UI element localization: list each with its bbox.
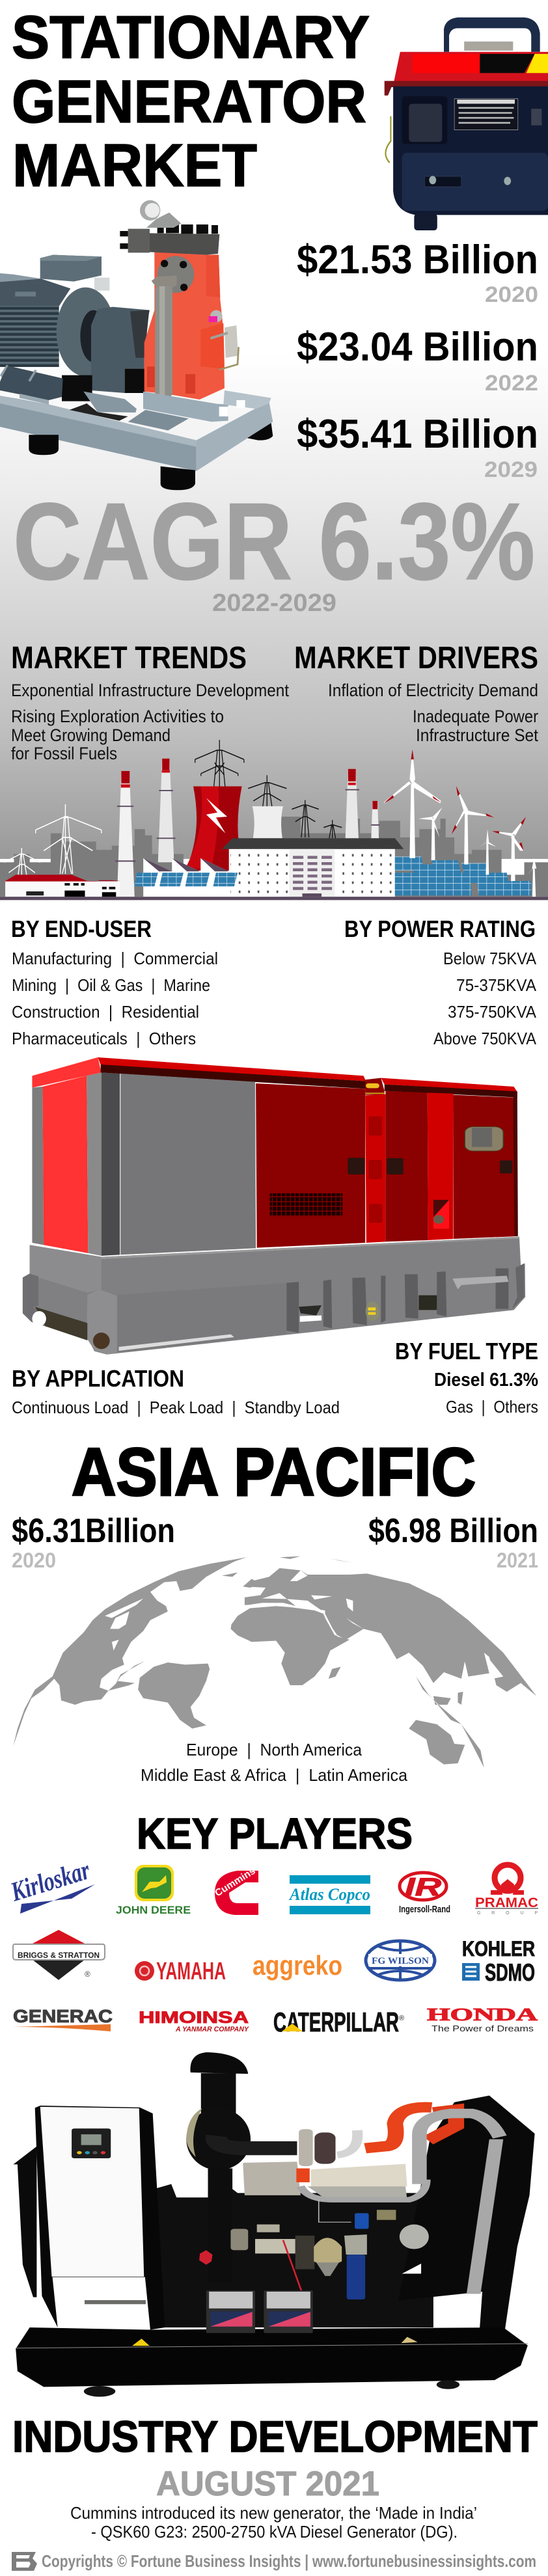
illustration: power plant skyline: [0, 740, 548, 900]
logo: Honda: HONDA: [427, 2005, 538, 2024]
logo: Ingersoll Rand: [399, 1873, 450, 1915]
title: GENERATOR: [12, 68, 366, 135]
Asia Pacific value 2020: $6.31Billion: [12, 1512, 175, 1550]
CAGR figure: 2022-2029: [212, 590, 336, 617]
panel: by fuel type: [395, 1338, 538, 1417]
logo: Caterpillar: ®: [399, 2014, 404, 2022]
logo: FG Wilson: [366, 1941, 435, 1980]
text: development description: Cummins introduced its new generator, the ‘Made in India’: [70, 2503, 477, 2523]
pylons: [4, 740, 342, 874]
panel: by power rating: [344, 915, 537, 1048]
icon: portable red generator: [385, 18, 548, 230]
panel: market trends: Rising Exploration Activities to: [11, 707, 224, 726]
white cooling tower: [253, 806, 283, 838]
logo: Pramac: PRAMAC: [475, 1895, 538, 1910]
logo: Himoinsa: [139, 2009, 250, 2033]
date: August 2021: AUGUST 2021: [156, 2465, 379, 2503]
text: development description: - QSK60 G23: 2500-2750 kVA Diesel Generator (DG).: [91, 2522, 458, 2542]
panel: by power rating: Below 75KVA: [443, 949, 537, 968]
logo: Briggs and Stratton: ®: [85, 1970, 90, 1979]
logo: Honda: [427, 2005, 538, 2033]
image: open diesel generator set with engine: [13, 2052, 535, 2396]
logo: Briggs and Stratton: BRIGGS & STRATTON: [18, 1951, 100, 1960]
ground strip: [0, 897, 548, 900]
logo: Yamaha: YAMAHA: [156, 1958, 226, 1985]
panel: by application: [12, 1365, 340, 1417]
logo: FG Wilson: FG WILSON: [372, 1956, 429, 1966]
logo: Kohler SDMO: [462, 1937, 535, 1986]
panel: by end-user: Construction | Residential: [12, 1002, 199, 1022]
title: [12, 3, 370, 199]
panel: market trends: MARKET TRENDS: [11, 641, 247, 675]
Asia Pacific value 2020: 2020: [12, 1549, 56, 1572]
chimney group: [115, 759, 379, 897]
regions list: Europe | North America: [186, 1740, 363, 1759]
market value 2020: 2020: [485, 282, 538, 307]
Asia Pacific value 2021: 2021: [497, 1549, 538, 1572]
title: STATIONARY: [12, 3, 370, 71]
logo: John Deere: JOHN DEERE: [116, 1904, 191, 1916]
logo: Kohler SDMO: KOHLER: [462, 1937, 535, 1960]
logo: Pramac: GROUP: [477, 1911, 538, 1916]
logo: Briggs and Stratton: [13, 1930, 105, 1980]
panel: market trends: Meet Growing Demand: [11, 725, 171, 745]
panel: by application: BY APPLICATION: [12, 1365, 184, 1392]
factory sheds: [143, 858, 229, 897]
logo: Atlas Copco: Atlas Copco: [288, 1885, 370, 1904]
world map: [13, 1556, 536, 1768]
icon: electric motor and red pump unit: [0, 200, 273, 490]
panel: market trends: for Fossil Fuels: [11, 744, 117, 763]
panel: by application: Continuous Load | Peak Load | Standby Load: [12, 1398, 340, 1417]
market value 2022: [297, 325, 538, 396]
logo: Kirloskar: [7, 1855, 95, 1914]
image: enclosed red and grey diesel generator: [23, 1057, 525, 1355]
logo: Caterpillar: CATERPILLAR: [273, 2007, 399, 2037]
logo: Himoinsa: A YANMAR COMPANY: [175, 2026, 250, 2033]
market value 2029: 2029: [484, 457, 538, 482]
panel: by power rating: 375-750KVA: [448, 1002, 537, 1022]
Asia Pacific value 2020: [12, 1512, 175, 1572]
red cooling tower: [185, 787, 242, 871]
market value 2022: $23.04 Billion: [297, 325, 538, 370]
panel: market drivers: Infrastructure Set: [416, 725, 538, 745]
panel: by end-user: [11, 915, 218, 1048]
regions list: Middle East & Africa | Latin America: [141, 1765, 408, 1785]
regions list: [141, 1740, 408, 1785]
logo: Cummins: [213, 1865, 258, 1915]
logo: Caterpillar: [273, 2007, 404, 2037]
logo: Cummins: Cummins: [213, 1865, 257, 1899]
logo: Atlas Copco: [288, 1875, 370, 1914]
panel: by power rating: 75-375KVA: [456, 975, 537, 995]
Asia Pacific value 2021: [368, 1512, 538, 1572]
panel: by end-user: Mining | Oil & Gas | Marine: [12, 975, 210, 995]
heading: key players: KEY PLAYERS: [137, 1810, 413, 1858]
market value 2020: $21.53 Billion: [297, 237, 538, 282]
logo: Pramac: [475, 1865, 538, 1916]
market value 2020: [297, 237, 538, 307]
main building: [222, 838, 404, 897]
panel: by end-user: BY END-USER: [11, 915, 152, 942]
market value 2022: 2022: [485, 371, 538, 396]
panel: market trends: [11, 641, 289, 763]
heading: Asia Pacific: ASIA PACIFIC: [72, 1435, 476, 1510]
logo: Himoinsa: HIMOINSA: [139, 2009, 249, 2027]
small warehouse: [5, 874, 120, 897]
panel: market drivers: [294, 641, 538, 745]
panel: by end-user: Pharmaceuticals | Others: [12, 1029, 196, 1048]
wind turbines: [384, 750, 536, 897]
panel: by end-user: Manufacturing | Commercial: [12, 949, 218, 968]
panel: by fuel type: Diesel 61.3%: [434, 1370, 538, 1390]
logo: Yamaha: [135, 1958, 226, 1985]
logo: Generac: GENERAC: [13, 2006, 113, 2026]
market value 2029: [297, 412, 538, 482]
panel: by fuel type: Gas | Others: [446, 1397, 538, 1417]
panel: market trends: Exponential Infrastructure Development: [11, 681, 289, 700]
logo: Ingersoll Rand: IR: [405, 1873, 441, 1901]
text: development description: [70, 2503, 477, 2542]
top gradient background panel: [0, 0, 548, 859]
title: MARKET: [12, 131, 257, 199]
logo: John Deere: [116, 1865, 191, 1916]
panel: by power rating: Above 750KVA: [433, 1029, 537, 1048]
logo: Honda: The Power of Dreams: [432, 2024, 534, 2033]
solar panels: [134, 856, 531, 895]
logo: Aggreko: aggreko: [253, 1950, 342, 1981]
logo: Ingersoll Rand: Ingersoll-Rand: [399, 1904, 450, 1915]
logo: Kirloskar: Kirloskar: [7, 1855, 94, 1908]
market value 2029: $35.41 Billion: [297, 412, 538, 457]
